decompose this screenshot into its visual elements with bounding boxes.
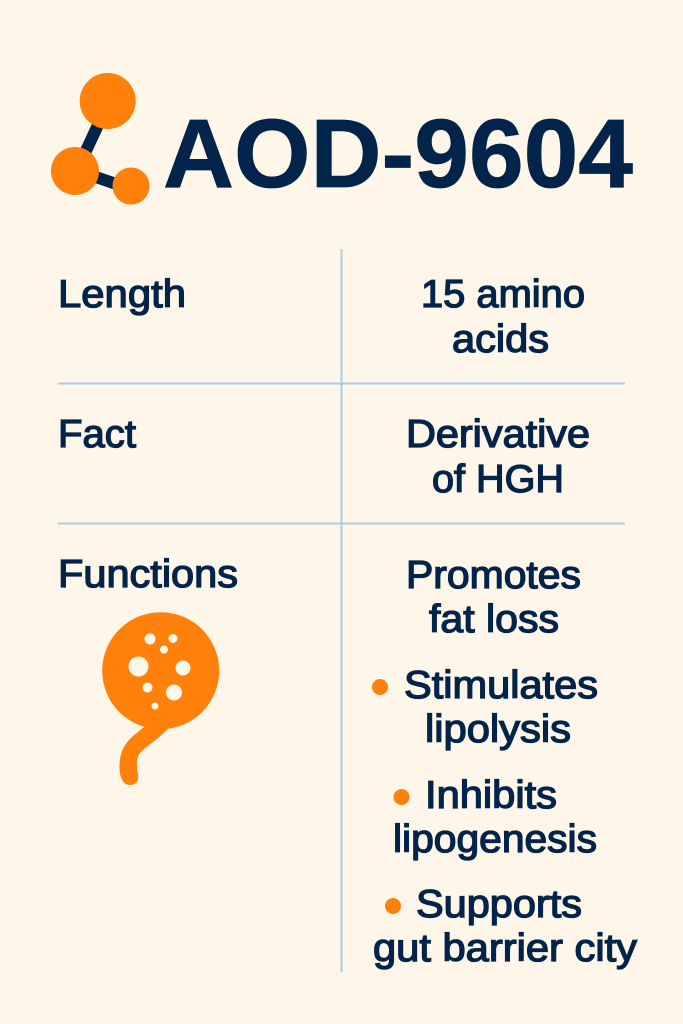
- icon: molecule: [51, 73, 150, 204]
- value: promotes fat loss: fat loss: [429, 598, 559, 641]
- bullet: stimulates lipolysis: Stimulates: [404, 664, 598, 707]
- value: derivative of HGH: [406, 413, 590, 501]
- value: 15 amino acids: acids: [452, 318, 549, 361]
- bullet: inhibits lipogenesis: [393, 774, 597, 861]
- bullet: stimulates lipolysis: lipolysis: [425, 708, 571, 751]
- row: fact: [58, 413, 590, 501]
- value: promotes fat loss: [406, 554, 581, 641]
- bullet: supports gut barrier city: Supports: [416, 883, 582, 926]
- bullet: inhibits lipogenesis: Inhibits: [425, 774, 557, 817]
- value: promotes fat loss: Promotes: [406, 554, 581, 597]
- label: fact: Fact: [58, 413, 136, 456]
- table grid: [58, 249, 625, 972]
- bullet: stimulates lipolysis: [372, 664, 598, 751]
- value: 15 amino acids: 15 amino: [421, 273, 585, 316]
- bullet: inhibits lipogenesis: lipogenesis: [393, 818, 597, 861]
- title: AOD-9604: [163, 99, 633, 208]
- value: 15 amino acids: [421, 273, 585, 361]
- row: length: [58, 273, 585, 361]
- icon: fat cell: [102, 612, 219, 785]
- value: derivative of HGH: Derivative: [406, 413, 590, 456]
- label: length: Length: [58, 273, 186, 316]
- bullet: supports gut barrier city: [373, 883, 638, 970]
- bullet: supports gut barrier city: gut barrier city: [373, 927, 638, 970]
- label: functions: Functions: [58, 553, 238, 596]
- value: derivative of HGH: of HGH: [432, 458, 564, 501]
